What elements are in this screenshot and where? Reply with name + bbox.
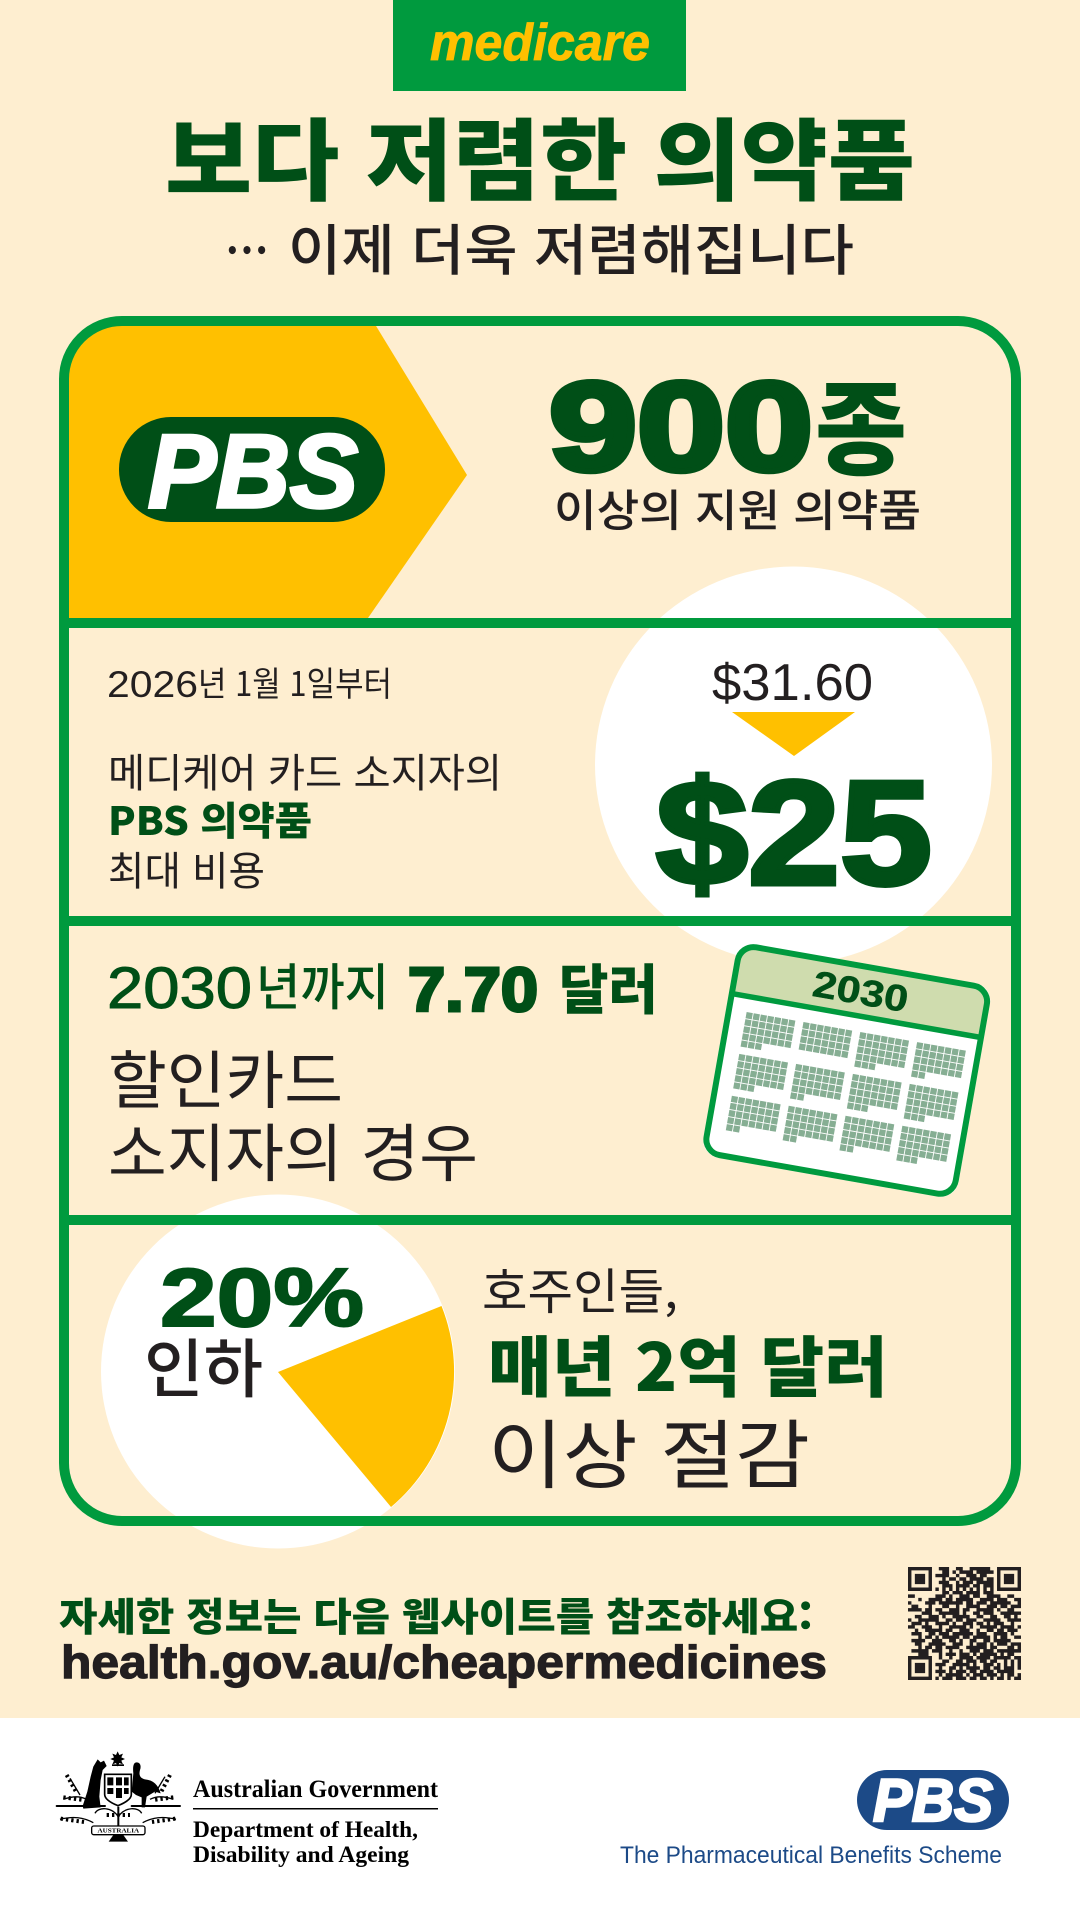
yellow PBS arrow <box>69 321 467 618</box>
stat: 20 percent cut: 인하 <box>144 1319 263 1411</box>
title: 보다 저렴한 의약품 <box>165 90 915 219</box>
Pharmaceutical Benefits Scheme caption: The Pharmaceutical Benefits Scheme <box>620 1842 1002 1869</box>
icon: kangaroo <box>83 1759 107 1809</box>
subtitle: … <box>225 212 269 284</box>
stat: 900 medicines: 900 <box>549 356 813 497</box>
text: from date: 2026 <box>107 664 198 705</box>
text: concession card holders <box>108 1031 478 1195</box>
text: Medicare card holders: PBS 의약품 <box>108 791 312 847</box>
Australian Government wordmark: Department of Health, <box>193 1817 418 1842</box>
Australian Government wordmark: Disability and Ageing <box>193 1842 410 1867</box>
subtitle: 이제 더욱 저렴해집니다 <box>288 206 854 286</box>
stat: 20 percent cut <box>144 1251 364 1411</box>
icon: commonwealth star <box>110 1751 125 1767</box>
white pie circle <box>101 1194 455 1548</box>
icon: Australian coat of arms <box>57 1751 180 1842</box>
stat: 900 medicines: 이상의 지원 의약품 <box>554 475 921 539</box>
price drop: $25 <box>656 751 932 916</box>
text: 7.70 by 2030: 달러 <box>559 946 658 1025</box>
pie wedge: 20 percent <box>278 1306 454 1507</box>
text: Australians save: 이상 절감 <box>488 1395 810 1504</box>
stat: 900 medicines: 종 <box>815 347 907 496</box>
text: 7.70 by 2030: 2030 <box>107 956 252 1021</box>
medicare logo: medicare <box>430 14 650 72</box>
stat: 20 percent cut: 20% <box>160 1251 364 1344</box>
price drop <box>656 654 932 916</box>
icon: wattle sprigs <box>57 1775 180 1827</box>
text: Australians save: 매년 2억 달러 <box>488 1315 888 1411</box>
text: concession card holders: 소지자의 경우 <box>108 1104 478 1195</box>
PBS pill logo: PBS <box>148 414 358 530</box>
calendar icon <box>700 941 993 1200</box>
Australian Government wordmark <box>193 1776 439 1867</box>
footer white band <box>0 1718 1080 1920</box>
text: Medicare card holders <box>108 741 502 897</box>
Australian Government wordmark: Australian Government <box>193 1776 439 1803</box>
more info text: 자세한 정보는 다음 웹사이트를 참조하세요: <box>59 1587 813 1643</box>
price drop: $31.60 <box>712 654 873 712</box>
text: Medicare card holders: 메디케어 카드 소지자의 <box>108 741 502 799</box>
medicare logo <box>393 0 686 91</box>
PBS blue logo: PBS <box>873 1767 993 1834</box>
text: from date <box>107 657 392 706</box>
white circle: price <box>595 566 992 964</box>
ribbon <box>92 1826 145 1835</box>
text: from date: 년 1월 1일부터 <box>198 657 392 706</box>
text: Australians save: 호주인들, <box>482 1253 678 1324</box>
website URL: health.gov.au/cheapermedicines <box>61 1636 827 1688</box>
QR code <box>908 1567 1021 1680</box>
text: 7.70 by 2030 <box>107 946 658 1025</box>
text: Australians save <box>482 1253 888 1504</box>
icon: Australian coat of arms: AUSTRALIA <box>97 1828 140 1835</box>
panel frame <box>59 321 1021 1521</box>
stat: 900 medicines <box>549 347 921 539</box>
icon: emu <box>132 1762 161 1807</box>
icon: shield <box>105 1774 131 1806</box>
text: Medicare card holders: 최대 비용 <box>108 839 265 897</box>
text: 7.70 by 2030: 7.70 <box>408 956 538 1025</box>
calendar icon: 2030 <box>810 963 911 1020</box>
text: 7.70 by 2030: 년까지 <box>256 948 389 1020</box>
text: concession card holders: 할인카드 <box>108 1031 343 1122</box>
